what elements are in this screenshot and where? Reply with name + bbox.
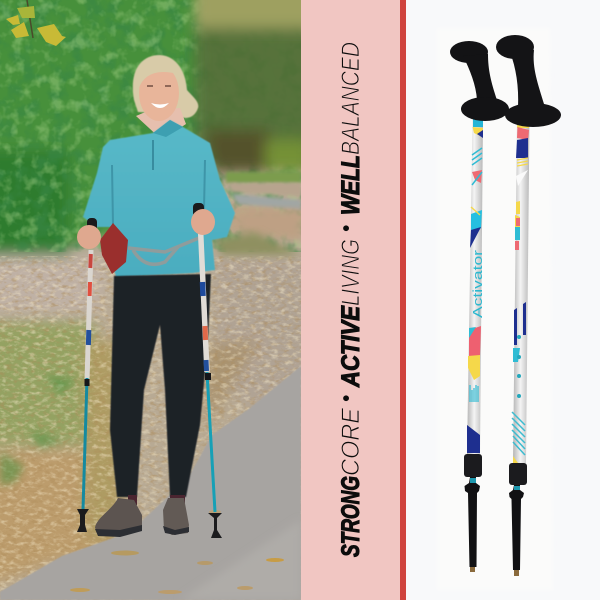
left shaft <box>467 120 483 454</box>
distant trees <box>195 0 320 172</box>
green grass patches <box>0 375 75 485</box>
right shaft <box>513 120 530 463</box>
left trekking pole <box>77 218 97 532</box>
smile <box>151 103 169 108</box>
product: left pole <box>450 41 509 572</box>
fleece top <box>83 120 235 277</box>
face <box>139 72 179 121</box>
distant sand and path <box>228 183 301 196</box>
tree branch with yellow leaves <box>6 0 66 46</box>
waist belt <box>128 238 199 264</box>
right tip <box>509 485 524 570</box>
socks <box>128 495 185 505</box>
right shaft graphics <box>512 110 529 463</box>
tagline: STRONG CORE • ACTIVE LIVING • WELL BALANCED: LIVING <box>337 239 365 306</box>
grass strip <box>226 172 301 183</box>
hands <box>77 225 101 249</box>
left shaft graphics <box>467 118 485 453</box>
tagline: STRONG CORE • ACTIVE LIVING • WELL BALANCED <box>336 42 365 557</box>
left shoe <box>95 498 142 530</box>
lighter backdrop behind poles <box>437 28 553 590</box>
tagline: STRONG CORE • ACTIVE LIVING • WELL BALANCED: • <box>336 395 358 402</box>
fallen leaves on sidewalk <box>70 510 284 594</box>
right pole basket <box>208 513 222 538</box>
pole brand text: Activator <box>470 249 485 318</box>
woman <box>77 55 235 538</box>
right collar <box>509 463 527 485</box>
eyes <box>147 85 171 87</box>
sidewalk <box>0 366 301 600</box>
left tip <box>464 477 480 567</box>
neck and scarf <box>136 108 186 132</box>
photo background: autumn park <box>0 0 320 600</box>
left grip <box>450 41 509 121</box>
tagline: STRONG CORE • ACTIVE LIVING • WELL BALANCED: STRONG <box>337 476 365 557</box>
product: right pole <box>496 35 561 576</box>
tagline: STRONG CORE • ACTIVE LIVING • WELL BALANCED: ACTIVE <box>337 305 365 388</box>
left pole basket <box>77 509 89 532</box>
hair <box>133 55 198 118</box>
leggings <box>110 274 211 497</box>
pink tagline panel <box>301 0 400 600</box>
tagline: STRONG CORE • ACTIVE LIVING • WELL BALANCED: BALANCED <box>337 42 365 155</box>
fringe <box>140 65 173 85</box>
white product panel <box>406 0 600 600</box>
right grip <box>496 35 561 127</box>
tagline: STRONG CORE • ACTIVE LIVING • WELL BALANCED: WELL <box>337 155 365 215</box>
photo: woman walking with poles <box>0 0 320 600</box>
right shoe <box>163 498 189 535</box>
right trekking pole <box>193 203 222 538</box>
waist bag <box>100 223 128 274</box>
tagline: STRONG CORE • ACTIVE LIVING • WELL BALANCED: • <box>336 225 358 232</box>
tagline: STRONG CORE • ACTIVE LIVING • WELL BALANCED: CORE <box>337 408 365 476</box>
left collar <box>464 454 482 477</box>
red divider stripe <box>400 0 406 600</box>
